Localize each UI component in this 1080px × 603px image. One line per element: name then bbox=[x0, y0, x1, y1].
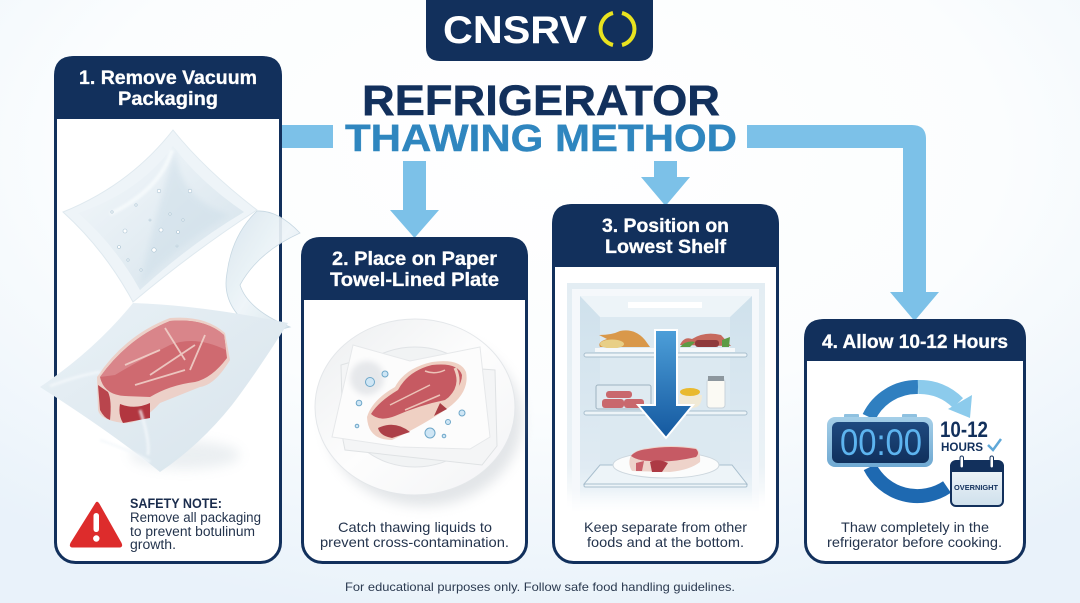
safety note text bbox=[130, 496, 261, 552]
top shelf food bbox=[595, 330, 735, 352]
title: THAWING METHOD bbox=[345, 118, 737, 160]
step 4 caption: refrigerator before cooking. bbox=[827, 534, 1002, 550]
icon: digital timer: 00:00 bbox=[840, 422, 922, 463]
steak on lowest shelf bbox=[613, 446, 719, 478]
image: steak in vacuum bag bbox=[40, 303, 288, 472]
icon: digital timer bbox=[827, 414, 933, 467]
icon: overnight calendar bbox=[951, 456, 1003, 506]
step 4 caption: Thaw completely in the bbox=[841, 519, 989, 535]
step 2 header bbox=[301, 237, 528, 300]
duration label bbox=[940, 417, 1001, 454]
step 4 caption bbox=[827, 519, 1002, 550]
safety note text: Remove all packaging bbox=[130, 510, 261, 525]
step 3 header: Lowest Shelf bbox=[605, 237, 727, 258]
step 3 header: 3. Position on bbox=[602, 216, 729, 237]
arrow: downward to lowest shelf bbox=[638, 330, 693, 438]
panel: step 1 remove vacuum packaging bbox=[40, 56, 300, 562]
middle shelf food bbox=[596, 376, 725, 409]
step 1 header: Packaging bbox=[118, 89, 218, 110]
icon: overnight calendar: OVERNIGHT bbox=[954, 485, 999, 492]
icon: circular time arrow bbox=[869, 387, 972, 496]
arrow: title to step 3 bbox=[641, 161, 690, 206]
step 4 header bbox=[804, 319, 1026, 361]
title bbox=[345, 77, 737, 160]
step 1 header: 1. Remove Vacuum bbox=[79, 68, 257, 89]
step 2 caption: Catch thawing liquids to bbox=[338, 519, 492, 535]
panel: step 3 lowest shelf bbox=[552, 204, 779, 562]
image: steak on paper towel plate bbox=[315, 319, 522, 506]
step 3 header bbox=[552, 204, 779, 267]
step 2 header: 2. Place on Paper bbox=[332, 249, 498, 270]
step 2 header: Towel-Lined Plate bbox=[330, 270, 499, 291]
panel: step 2 paper towel-lined plate bbox=[301, 237, 528, 562]
logo: CNSRV badge bbox=[426, 0, 653, 61]
step 3 caption bbox=[584, 519, 747, 550]
duration label: 10-12 bbox=[940, 417, 988, 442]
refrigerator shelves bbox=[584, 353, 747, 487]
footer disclaimer: For educational purposes only. Follow safe food handling guidelines. bbox=[345, 580, 735, 594]
safety note text: growth. bbox=[130, 537, 176, 552]
safety note text: to prevent botulinum bbox=[130, 524, 255, 539]
arrow: title to step 4 bbox=[747, 125, 939, 321]
icon: red warning triangle bbox=[70, 502, 122, 547]
step 3 caption: foods and at the bottom. bbox=[587, 534, 744, 550]
image: empty vacuum bag with droplets bbox=[63, 130, 300, 334]
step 1 header bbox=[54, 56, 282, 119]
step 3 caption: Keep separate from other bbox=[584, 519, 747, 535]
step 2 caption: prevent cross-contamination. bbox=[320, 534, 509, 550]
duration label: HOURS bbox=[941, 440, 983, 454]
arrow: title to step 2 and connector from step 1 bbox=[282, 125, 439, 238]
title: REFRIGERATOR bbox=[362, 77, 720, 125]
step 4 header: 4. Allow 10-12 Hours bbox=[822, 332, 1008, 353]
safety note text: SAFETY NOTE: bbox=[130, 496, 222, 511]
image: open refrigerator interior bbox=[560, 283, 772, 512]
step 2 caption bbox=[320, 519, 509, 550]
panel: step 4 allow 10-12 hours bbox=[804, 319, 1026, 562]
logo: CNSRV badge: CNSRV bbox=[443, 9, 587, 52]
